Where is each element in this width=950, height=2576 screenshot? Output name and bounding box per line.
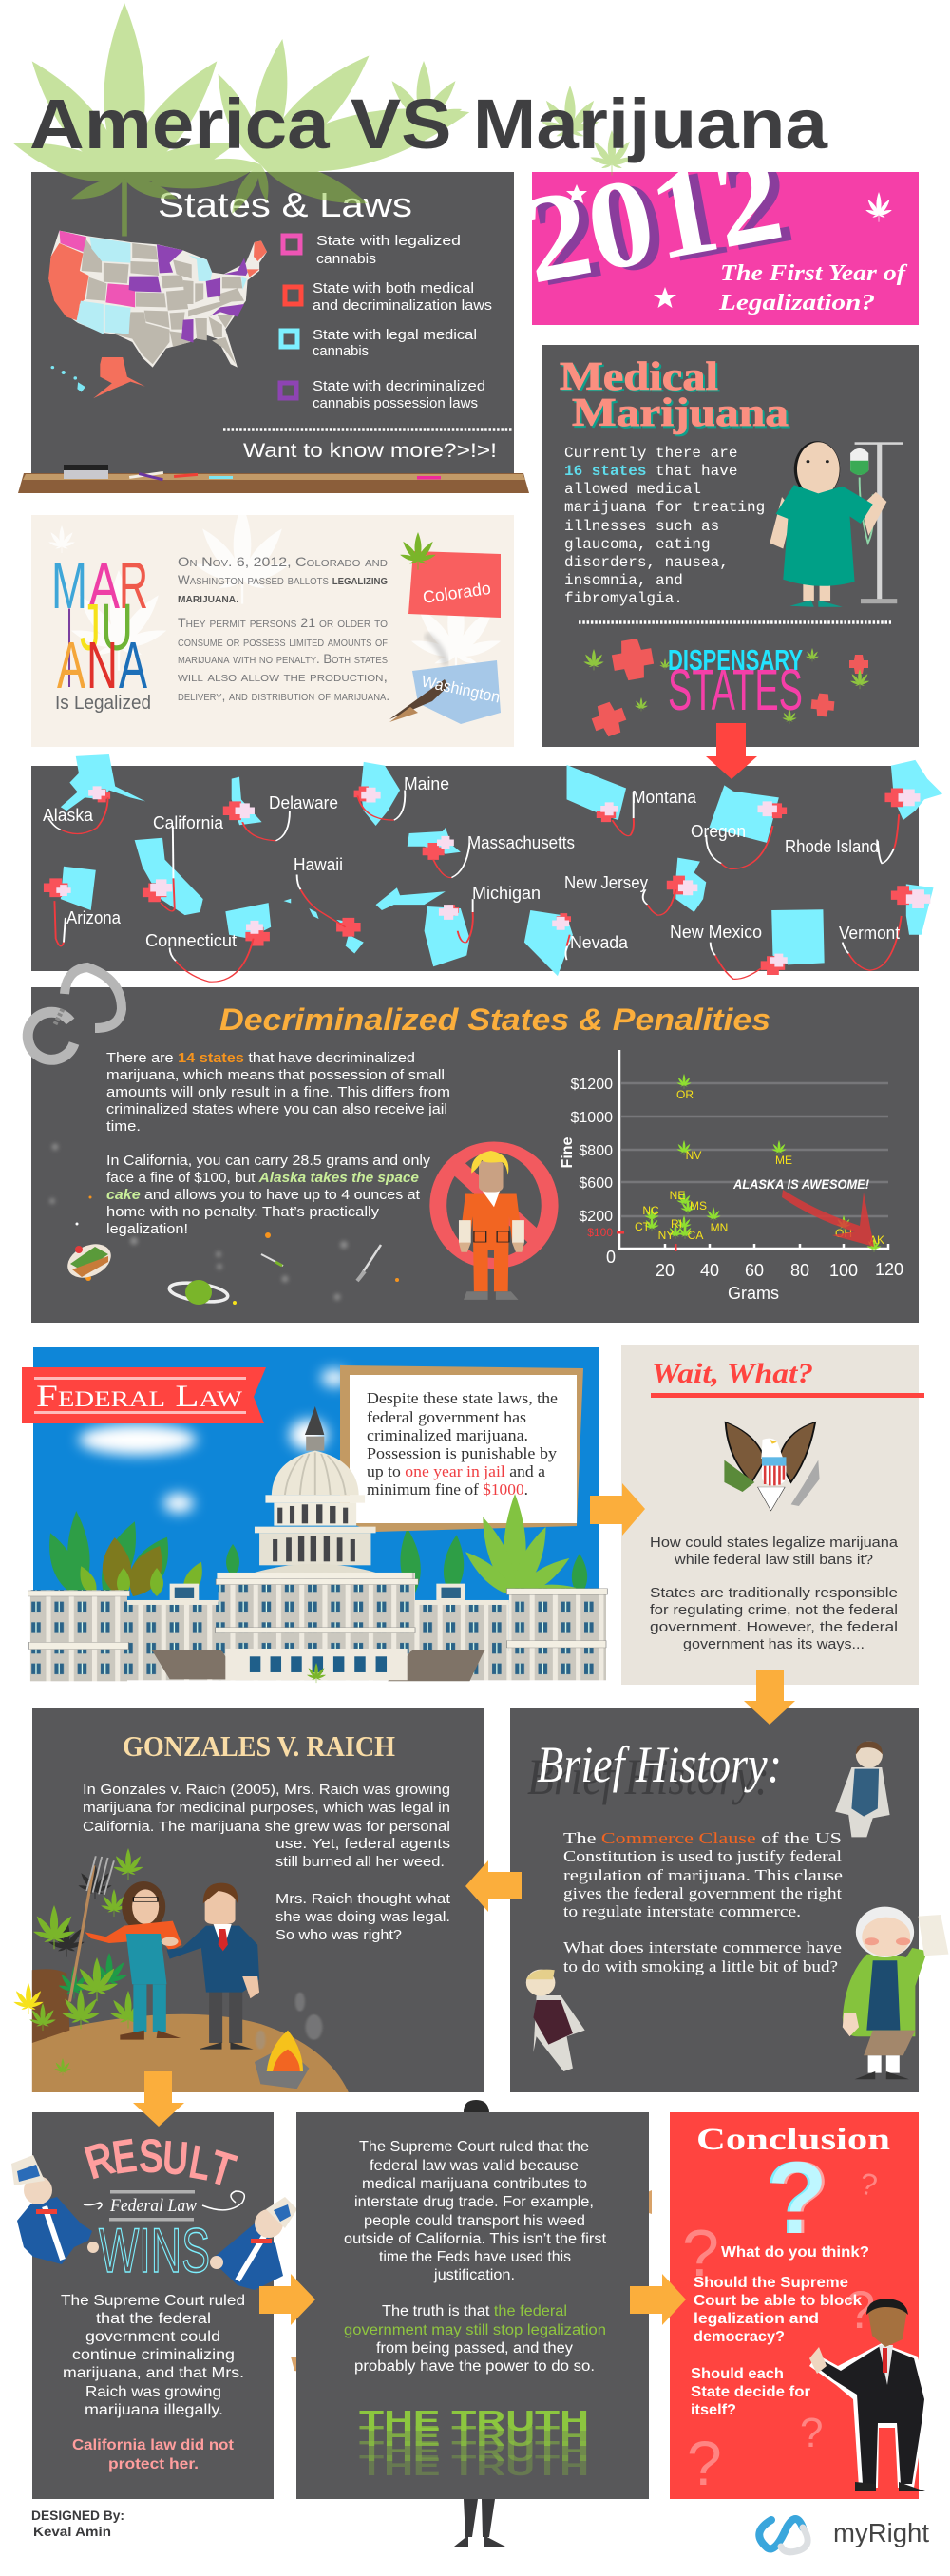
state labels: California: [153, 813, 224, 832]
state labels: Delaware: [269, 793, 338, 812]
body copy: marijuana, and that Mrs.: [63, 2365, 244, 2381]
stacked word MARIJUANA: A: [119, 628, 147, 702]
arrow: down to brief history: [744, 1670, 795, 1725]
designer credit: [31, 2508, 124, 2539]
legend: [280, 233, 492, 411]
body copy: justification.: [433, 2267, 515, 2283]
dispensary states lettering: STATES: [668, 658, 803, 722]
faint question marks: ?: [846, 2280, 875, 2339]
heading: RESULT arched: R: [79, 2130, 121, 2190]
heading: RESULT arched: U: [161, 2130, 190, 2185]
body copy: federal law was valid because: [370, 2158, 579, 2174]
body copy: to do with smoking a little bit of bud?: [563, 1957, 838, 1975]
hillside: [32, 1969, 349, 2092]
body copy: marijuana illegally.: [85, 2402, 223, 2418]
body copy: What do you think?: [721, 2244, 869, 2261]
handcuffs: [28, 967, 122, 1059]
body copy: consume or possess limited amounts of: [178, 634, 388, 649]
big year numerals: [532, 172, 792, 285]
dispensary states lettering: DISPENSARY: [668, 643, 803, 677]
state labels: [43, 774, 900, 952]
y axis labels: $800: [579, 1143, 613, 1159]
x axis labels: Grams: [728, 1284, 779, 1303]
body copy: while federal law still bans it?: [674, 1553, 873, 1568]
legend swatch: legalized: [283, 236, 300, 253]
data labels: MS: [690, 1199, 707, 1212]
note text: federal government has: [367, 1408, 526, 1426]
heading: RESULT arched: [79, 2128, 241, 2198]
body copy: to regulate interstate commerce.: [563, 1902, 801, 1920]
heading: Medical Marijuana: Medical: [561, 357, 720, 401]
man behind truth panel: [291, 2100, 652, 2547]
subheading: federal law: Federal Law: [109, 2196, 197, 2216]
note text: [367, 1389, 558, 1498]
founding father ghosts: [526, 1742, 948, 2079]
heading: RESULT arched: S: [139, 2129, 163, 2183]
space doodles: cake, planet, fork, knife: [49, 1144, 399, 1305]
state labels: New Mexico: [670, 923, 762, 942]
data labels: [635, 1088, 884, 1247]
Colorado note: [399, 532, 501, 618]
body copy: [344, 2139, 607, 2375]
body copy: criminalized states where you can also receive jail: [106, 1102, 447, 1117]
hundred dollar markers: [587, 1226, 676, 1251]
heading with reflection: Brief History:: [537, 1736, 782, 1793]
x axis labels: [656, 1260, 903, 1303]
stacked word MARIJUANA: [51, 548, 148, 712]
body copy: Mrs. Raich thought what: [276, 1891, 451, 1907]
note text: up to one year in jail and a: [367, 1462, 545, 1480]
body copy: government. However, the federal: [650, 1620, 898, 1635]
y axis labels: $1000: [570, 1110, 613, 1126]
state labels: Michigan: [472, 884, 541, 903]
body copy: democracy?: [694, 2329, 785, 2345]
body copy: Currently there are: [564, 445, 737, 462]
panel: decriminalized states and penalties: [28, 967, 919, 1323]
designer credit: DESIGNED By:: [31, 2508, 124, 2523]
stacked word MARIJUANA: A: [88, 548, 120, 622]
designer credit: Keval Amin: [33, 2524, 111, 2539]
legs and shoes: [454, 2499, 505, 2547]
body copy: [83, 1782, 451, 1943]
callout: Alaska is awesome: ALASKA IS AWESOME!: [732, 1176, 869, 1192]
data labels: NV: [686, 1149, 701, 1162]
y axis labels: $200: [579, 1209, 613, 1225]
tagline: [718, 261, 907, 315]
panel: result: [11, 2112, 297, 2499]
y axis labels: $1200: [570, 1077, 613, 1093]
body copy: They permit persons 21 or older to: [178, 615, 388, 630]
faint question marks: [682, 2166, 881, 2498]
y axis labels: 0: [606, 1248, 616, 1267]
body copy: amounts will only result in a fine. This differs from: [106, 1085, 450, 1100]
body copy: The Commerce Clause of the US: [563, 1829, 842, 1847]
body copy: that the federal: [96, 2311, 211, 2327]
body copy: time the Feds have used this: [379, 2249, 571, 2265]
body copy: government could: [86, 2329, 220, 2345]
state labels: Alaska: [43, 806, 94, 825]
heading: THE TRUTH with reflections: THE TRUTH: [359, 2419, 589, 2452]
data labels: NC: [642, 1204, 659, 1217]
heading: RESULT arched: E: [109, 2128, 140, 2185]
body copy: home with no penalty. That’s practically: [106, 1205, 380, 1220]
body copy: fibromyalgia.: [564, 590, 683, 607]
hands: [291, 2190, 652, 2373]
chalk tray: [18, 465, 529, 493]
body copy: marijuana for treating: [564, 499, 765, 516]
myRight logo: [759, 2518, 929, 2552]
body copy: Should the Supreme: [694, 2275, 848, 2291]
tagline: Legalization?: [718, 291, 875, 315]
big cannabis leaves behind title: [10, 3, 634, 237]
heading: RESULT arched: L: [185, 2135, 215, 2191]
body copy: California. The marijuana she grew was for personal: [83, 1819, 450, 1835]
data labels: OR: [676, 1088, 694, 1101]
body copy: probably have the power to do so.: [354, 2358, 595, 2375]
faint question marks: ?: [857, 2166, 881, 2203]
state labels: Massachusetts: [467, 833, 575, 852]
body copy: Constitution is used to justify federal: [563, 1847, 842, 1865]
dotted divider and prompt: Want to know more?>!>!: [243, 440, 497, 462]
y axis labels: $600: [579, 1175, 613, 1192]
legend swatch: decriminalized: [280, 383, 296, 398]
chart: fines versus grams: [560, 1050, 903, 1303]
panel: the truth: [296, 2112, 649, 2499]
x axis labels: 80: [790, 1261, 809, 1280]
red crosses and green leaves: [583, 637, 869, 740]
body copy: In California, you can carry 28.5 grams and only: [106, 1154, 431, 1169]
note text: Despite these state laws, the: [367, 1389, 558, 1407]
body copy: will also allow the production,: [178, 669, 388, 684]
body copy: time.: [106, 1119, 141, 1135]
state labels: Oregon: [691, 822, 746, 841]
heading: Decriminalized States & Penalities: [219, 1002, 770, 1037]
hundred dollar markers: $100: [587, 1226, 613, 1239]
legend swatch: medical and decriminalized: [285, 287, 301, 304]
body copy: people could transport his weed: [364, 2213, 585, 2229]
legend labels: State with legalized: [316, 233, 461, 249]
stacked word MARIJUANA: A: [57, 628, 86, 702]
heading: States and Laws: States & Laws: [158, 185, 412, 224]
body copy: cake and allows you to have up to 4 ounces at: [106, 1188, 420, 1203]
faint question marks: ?: [682, 2216, 719, 2290]
legend labels: State with both medical: [313, 280, 474, 296]
body copy: use. Yet, federal agents: [276, 1836, 450, 1852]
x axis ticks: [665, 1244, 888, 1250]
man in black suit: [809, 2299, 928, 2491]
heading: THE TRUTH with reflections: THE TRUTH: [359, 2404, 589, 2437]
large question mark: ?: [765, 2140, 827, 2255]
x axis labels: 60: [745, 1261, 764, 1280]
heading: GONZALES V. RAICH: [123, 1729, 395, 1763]
sky: [33, 1347, 599, 1651]
eagle seal: [724, 1422, 820, 1511]
body copy: [563, 1829, 843, 1975]
body copy: disorders, nausea,: [564, 554, 729, 571]
data labels: NE: [670, 1189, 685, 1202]
body copy: insomnia, and: [564, 572, 683, 589]
heading: Wait, What?: [652, 1358, 813, 1389]
panel: conclusion: [670, 2112, 928, 2499]
dotted divider: [579, 620, 891, 624]
data labels: OH: [835, 1227, 852, 1240]
legend labels: cannabis possession laws: [313, 395, 478, 411]
body copy: still burned all her weed.: [276, 1854, 445, 1870]
body copy: What does interstate commerce have: [563, 1938, 842, 1956]
stacked word MARIJUANA: U: [101, 590, 133, 664]
Uncle Sam left: [11, 2155, 99, 2264]
clouds: [79, 1369, 348, 1513]
heading: THE TRUTH with reflections: [359, 2404, 589, 2482]
heading: Medical Marijuana: Marijuana: [574, 393, 790, 437]
body copy: outside of California. This isn’t the first: [344, 2231, 607, 2247]
heading: Medical Marijuana: Marijuana: [572, 391, 788, 435]
head: [464, 2100, 489, 2112]
body copy: marijuana with no penalty. Both states: [178, 651, 388, 666]
body copy: regulation of marijuana. This clause: [563, 1866, 843, 1884]
dispensary states lettering: [668, 643, 803, 722]
body copy: for regulating crime, not the federal: [650, 1603, 898, 1618]
stars and leaf: [566, 184, 892, 308]
legend labels: and decriminalization laws: [313, 297, 492, 314]
body copy: [691, 2244, 869, 2418]
body copy: State decide for: [691, 2384, 810, 2400]
note frame with text: [340, 1365, 583, 1532]
state labels: Rhode Island: [785, 837, 879, 856]
ribbon heading: Federal Law: [36, 1380, 242, 1414]
body copy: face a fine of $100, but Alaska takes the space: [106, 1171, 419, 1186]
state shapes with connector arcs: [44, 754, 942, 982]
axes: [619, 1050, 889, 1249]
stacked word MARIJUANA: M: [51, 548, 87, 622]
data labels: CT: [635, 1220, 651, 1233]
data points: [644, 1074, 882, 1252]
legend labels: State with legal medical: [313, 327, 477, 343]
tagline: The First Year of: [720, 261, 907, 286]
big year numerals: 2012: [522, 129, 802, 314]
cannabis plants: [13, 1848, 147, 2075]
body copy: States are traditionally responsible: [650, 1586, 898, 1601]
body copy: Court be able to block: [694, 2293, 862, 2309]
state labels: New Jersey: [564, 873, 648, 892]
arrow: truth to conclusion: [630, 2274, 686, 2325]
panel: wait, what?: [621, 1345, 924, 1685]
state labels: Maine: [404, 774, 449, 793]
heading: WINS: WINS: [99, 2215, 210, 2285]
large question mark: ?: [768, 2140, 830, 2255]
conclusion note: [72, 2437, 235, 2472]
body copy: medical marijuana contributes to: [362, 2176, 587, 2192]
body copy: Raich was growing: [86, 2384, 221, 2400]
body copy: The truth is that the federal: [382, 2303, 567, 2319]
faint background leaves: [48, 504, 503, 678]
body copy: Washington passed ballots legalizing: [178, 572, 388, 587]
heading with reflection: Brief History:: [527, 1748, 770, 1805]
body copy: 16 states that have: [564, 463, 737, 480]
note text: criminalized marijuana.: [367, 1426, 528, 1444]
body copy: government may still stop legalization: [344, 2322, 606, 2338]
conclusion note: protect her.: [108, 2456, 199, 2472]
data labels: ME: [775, 1154, 792, 1167]
body copy: The Supreme Court ruled: [61, 2293, 245, 2309]
y axis labels: [570, 1077, 616, 1267]
Washington note with paintbrush: Washington: [420, 672, 502, 706]
cannabis leaf: [461, 1494, 577, 1604]
panel: Gonzales v. Raich: [13, 1708, 484, 2092]
body copy: [178, 554, 390, 703]
heading: Conclusion: [696, 2123, 890, 2157]
plants: [40, 1511, 587, 1604]
heading: RESULT arched: T: [203, 2140, 241, 2198]
body copy: [564, 445, 765, 607]
heading: Medical Marijuana: [560, 355, 790, 437]
prisoner with no sign: [438, 1147, 550, 1300]
panel: states and laws chalkboard: [18, 172, 529, 493]
y axis title: Fine: [560, 1136, 576, 1168]
logo mark: [759, 2519, 808, 2552]
state labels: Connecticut: [145, 931, 237, 950]
body copy: legalization!: [106, 1222, 188, 1237]
legend labels: cannabis: [316, 251, 376, 267]
body copy: government has its ways...: [683, 1637, 864, 1652]
small leaf at base: [307, 1663, 326, 1683]
body copy: from being passed, and they: [376, 2340, 573, 2357]
body copy: gives the federal government the right: [563, 1884, 842, 1902]
note text: minimum fine of $1000.: [367, 1480, 528, 1498]
patient with IV stand: [770, 441, 903, 607]
ribbon heading: [22, 1367, 266, 1423]
heading: Medical Marijuana: Medical: [560, 355, 718, 399]
body copy: [106, 1051, 450, 1237]
body copy: [650, 1536, 899, 1652]
data labels: CA: [688, 1229, 703, 1242]
subheading: Is Legalized: [55, 693, 151, 714]
data labels: MN: [711, 1221, 728, 1234]
body copy: delivery, and distribution of marijuana.: [178, 688, 390, 703]
stacked word MARIJUANA: I: [66, 584, 72, 712]
state labels: Hawaii: [294, 855, 343, 874]
body copy: marijuana.: [178, 590, 239, 605]
faint question marks: ?: [687, 2428, 722, 2498]
body copy: So who was right?: [276, 1927, 402, 1943]
data labels: RI: [671, 1217, 682, 1231]
body copy: illnesses such as: [564, 518, 719, 535]
body copy: legalization and: [694, 2311, 819, 2327]
state labels: Nevada: [570, 933, 629, 952]
body copy: continue criminalizing: [72, 2347, 235, 2363]
arrow: Gonzales to result: [133, 2071, 184, 2127]
body copy: Should each: [691, 2366, 784, 2382]
data labels: AK: [869, 1233, 884, 1247]
x axis labels: 120: [875, 1260, 903, 1279]
title: America VS Marijuana: [29, 85, 828, 163]
faint question marks: ?: [800, 2410, 823, 2456]
panel: dispensary states map: [31, 754, 942, 982]
body copy: There are 14 states that have decriminalized: [106, 1051, 415, 1066]
body copy: [61, 2293, 245, 2418]
heading: THE TRUTH with reflections: THE TRUTH: [359, 2434, 589, 2468]
heading: THE TRUTH with reflections: THE TRUTH: [359, 2449, 589, 2482]
panel: marijuana is legalized: [31, 504, 514, 747]
panel: medical marijuana: [542, 345, 919, 747]
state labels: Arizona: [66, 908, 122, 927]
legend swatch: medical: [281, 331, 297, 347]
Uncle Sam right: [210, 2197, 297, 2290]
Washington note with paintbrush: [390, 635, 502, 724]
legend labels: State with decriminalized: [313, 378, 485, 394]
arrow: to wait what: [590, 1483, 645, 1536]
body copy: On Nov. 6, 2012, Colorado and: [178, 554, 388, 569]
map of the United States: [48, 231, 267, 398]
body copy: allowed medical: [564, 481, 701, 498]
panel: brief history: [510, 1708, 948, 2092]
subheading: federal law: [84, 2190, 244, 2222]
body copy: The Supreme Court ruled that the: [359, 2139, 589, 2155]
x axis labels: 20: [656, 1261, 674, 1280]
body copy: marijuana for medicinal purposes, which was legal in: [83, 1800, 450, 1816]
legend labels: cannabis: [313, 343, 369, 359]
logo wordmark: myRight: [833, 2518, 929, 2547]
state labels: Vermont: [839, 924, 900, 943]
body copy: In Gonzales v. Raich (2005), Mrs. Raich was growing: [83, 1782, 450, 1798]
body copy: glaucoma, eating: [564, 536, 711, 553]
Colorado note: Colorado: [422, 579, 492, 607]
body copy: interstate drug trade. For example,: [354, 2194, 594, 2210]
stacked word MARIJUANA: N: [86, 628, 118, 702]
grid lines: [621, 1083, 888, 1216]
stacked word MARIJUANA: R: [119, 548, 148, 622]
panel: 2012 first year of legalization: [532, 172, 919, 325]
state labels: Montana: [632, 788, 697, 807]
arrow: callout to AK: [782, 1190, 874, 1247]
body copy: How could states legalize marijuana: [650, 1536, 899, 1551]
panel: federal law: [22, 1347, 607, 1683]
body copy: she was doing was legal.: [276, 1909, 450, 1925]
note text: Possession is punishable by: [367, 1444, 558, 1462]
x axis labels: 100: [829, 1261, 858, 1280]
capitol building: [28, 1406, 607, 1681]
data labels: NY: [658, 1229, 674, 1242]
body copy: itself?: [691, 2402, 736, 2418]
conclusion note: California law did not: [72, 2437, 235, 2453]
arrow: left to Gonzales: [466, 1860, 522, 1912]
arrow: red down: [706, 723, 757, 779]
legend labels: [313, 233, 492, 411]
x axis labels: 40: [700, 1261, 719, 1280]
arrow: result to truth: [259, 2274, 315, 2325]
heading underline: [651, 1393, 924, 1398]
stacked word MARIJUANA: J: [80, 590, 101, 664]
big year numerals: 2012: [512, 125, 792, 311]
body copy: marijuana, which means that possession of small: [106, 1068, 445, 1083]
illustration: Mrs. Raich, agent, fire: [69, 1856, 322, 2089]
